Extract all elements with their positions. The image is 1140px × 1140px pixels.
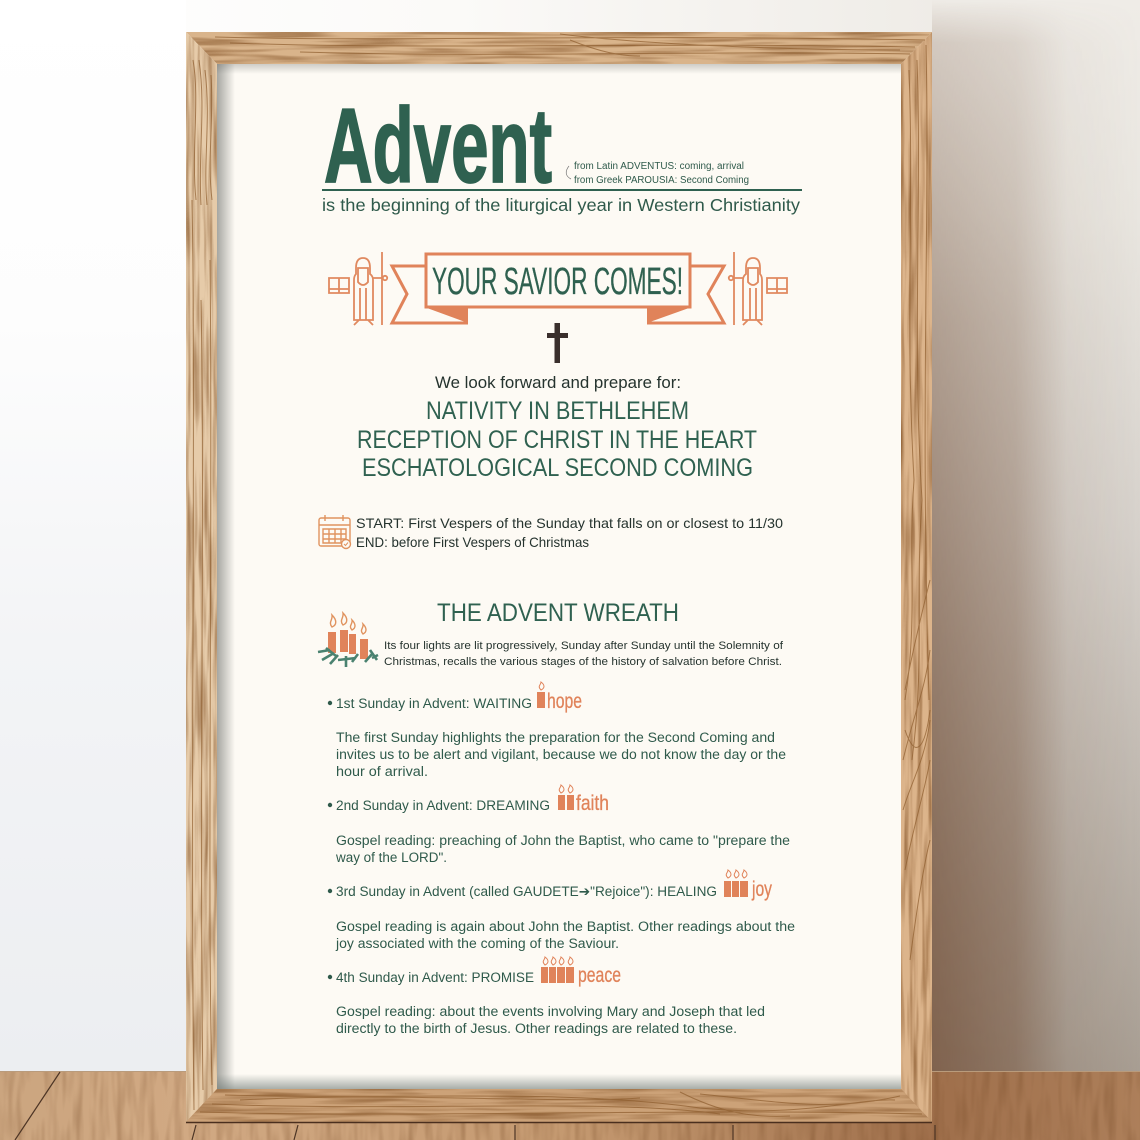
icon: left prophet with book [329, 252, 387, 325]
fourth Sunday: 4th Sunday in Advent: PROMISE [336, 970, 534, 985]
first Sunday [328, 682, 786, 779]
second Sunday: faith [576, 792, 609, 815]
wooden floor [0, 1072, 1140, 1140]
dates [356, 515, 783, 550]
first Sunday: hour of arrival. [336, 764, 428, 779]
second Sunday: 2nd Sunday in Advent: DREAMING [336, 798, 550, 813]
etymology notes [566, 161, 749, 186]
icon: right prophet with book [729, 252, 787, 325]
banner [392, 254, 724, 323]
three comings list: ESCHATOLOGICAL SECOND COMING [362, 454, 753, 482]
poster paper [217, 64, 901, 1089]
second Sunday: way of the LORD". [335, 850, 447, 865]
wreath description [384, 640, 784, 668]
fourth Sunday [328, 957, 765, 1036]
icon: cross [547, 323, 568, 363]
etymology notes: from Latin ADVENTUS: coming, arrival [574, 161, 744, 172]
three comings list: RECEPTION OF CHRIST IN THE HEART [357, 426, 757, 454]
wreath description: Its four lights are lit progressively, Sunday after Sunday until the Solemnity of [384, 640, 784, 652]
wreath description: Christmas, recalls the various stages of the history of salvation before Christ. [384, 656, 782, 668]
dates: END: before First Vespers of Christmas [356, 534, 589, 550]
three comings list: NATIVITY IN BETHLEHEM [426, 397, 689, 425]
three comings list [357, 397, 757, 482]
second Sunday [328, 785, 790, 865]
second Sunday: Gospel reading: preaching of John the Baptist, who came to "prepare the [336, 833, 790, 848]
icon: calendar [319, 515, 350, 548]
third Sunday: joy associated with the coming of the Saviour. [335, 936, 619, 951]
title: Advent [324, 87, 552, 205]
icon: advent wreath [318, 613, 378, 667]
fourth Sunday: directly to the birth of Jesus. Other readings are related to these. [336, 1021, 737, 1036]
first Sunday: hope [547, 690, 582, 713]
first Sunday: 1st Sunday in Advent: WAITING [336, 696, 532, 711]
fourth Sunday: Gospel reading: about the events involving Mary and Joseph that led [336, 1004, 765, 1019]
third Sunday: joy [751, 878, 772, 901]
dates: START: First Vespers of the Sunday that falls on or closest to 11/30 [356, 515, 783, 531]
subtitle: is the beginning of the liturgical year in Western Christianity [322, 195, 800, 215]
first Sunday: invites us to be alert and vigilant, because we do not know the day or the [336, 747, 786, 762]
wooden frame [186, 32, 932, 1122]
third Sunday: Gospel reading is again about John the Baptist. Other readings about the [336, 919, 795, 934]
intro line: We look forward and prepare for: [435, 373, 681, 392]
fourth Sunday: peace [578, 964, 621, 987]
first Sunday: The first Sunday highlights the preparation for the Second Coming and [336, 730, 775, 745]
title rule [322, 189, 802, 191]
third Sunday: 3rd Sunday in Advent (called GAUDETE➔"Rejoice"): HEALING [336, 884, 717, 899]
third Sunday [328, 870, 795, 951]
wreath heading: THE ADVENT WREATH [437, 599, 679, 627]
etymology notes: from Greek PAROUSIA: Second Coming [574, 175, 749, 186]
banner text: YOUR SAVIOR COMES! [432, 261, 683, 303]
